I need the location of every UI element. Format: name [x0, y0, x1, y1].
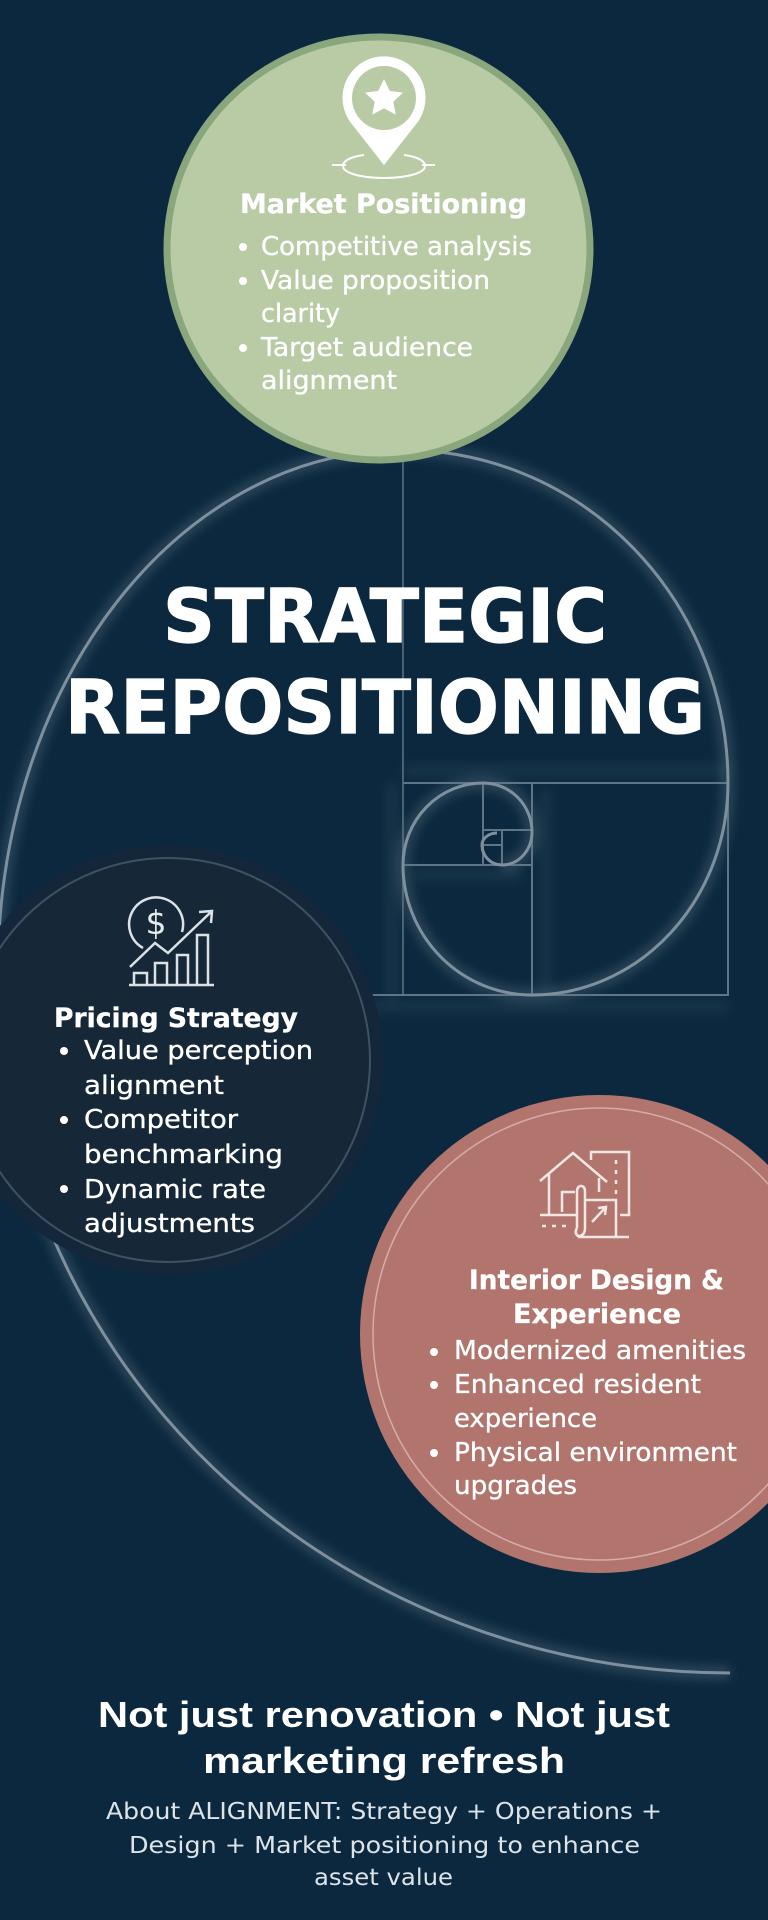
list: pricing strategy items: Competitor	[84, 1105, 238, 1135]
icon: dollar and rising chart: $	[146, 903, 166, 942]
footer description	[106, 1799, 662, 1891]
list: interior design items: experience	[454, 1404, 597, 1434]
heading: interior design and experience: Interior Design &	[469, 1265, 724, 1296]
title: REPOSITIONING	[65, 665, 705, 751]
heading: interior design and experience: Experience	[513, 1299, 681, 1330]
heading: market positioning: Market Positioning	[240, 189, 527, 220]
icon: map pin with star	[332, 56, 435, 178]
list: pricing strategy items: benchmarking	[84, 1140, 283, 1170]
panel: market positioning	[167, 37, 590, 460]
title	[65, 574, 705, 751]
list: interior design items: Modernized amenities	[454, 1336, 746, 1366]
footer headline	[98, 1694, 670, 1781]
list: interior design items: Enhanced resident	[454, 1370, 701, 1400]
list: pricing strategy items: alignment	[84, 1071, 224, 1101]
footer description: About ALIGNMENT: Strategy + Operations +	[106, 1799, 662, 1825]
list: pricing strategy items	[60, 1036, 313, 1239]
heading: pricing strategy: Pricing Strategy	[54, 1003, 298, 1034]
list: pricing strategy items: adjustments	[84, 1209, 255, 1239]
footer headline: Not just renovation • Not just	[98, 1694, 670, 1735]
list: interior design items	[430, 1336, 746, 1501]
footer description: asset value	[314, 1865, 453, 1891]
title: STRATEGIC	[163, 574, 607, 660]
list: pricing strategy items: Dynamic rate	[84, 1175, 266, 1205]
list: interior design items: upgrades	[454, 1471, 577, 1501]
list: market positioning items: Competitive analysis	[261, 232, 532, 262]
golden spiral diagram	[0, 450, 730, 1673]
list: market positioning items: Value proposition	[261, 266, 490, 296]
list: interior design items: Physical environment	[454, 1438, 737, 1468]
panel: interior design and experience	[360, 1095, 768, 1573]
icon: dollar and rising chart	[129, 897, 214, 985]
list: pricing strategy items: Value perception	[84, 1036, 313, 1066]
list: market positioning items	[239, 232, 532, 396]
panel: pricing strategy	[0, 845, 383, 1275]
icon: house and blueprint	[540, 1152, 629, 1237]
list: market positioning items: clarity	[261, 299, 340, 329]
heading: interior design and experience	[469, 1265, 724, 1330]
footer description: Design + Market positioning to enhance	[129, 1833, 640, 1859]
list: market positioning items: Target audience	[260, 333, 473, 363]
list: market positioning items: alignment	[261, 366, 397, 396]
footer headline: marketing refresh	[203, 1740, 565, 1781]
